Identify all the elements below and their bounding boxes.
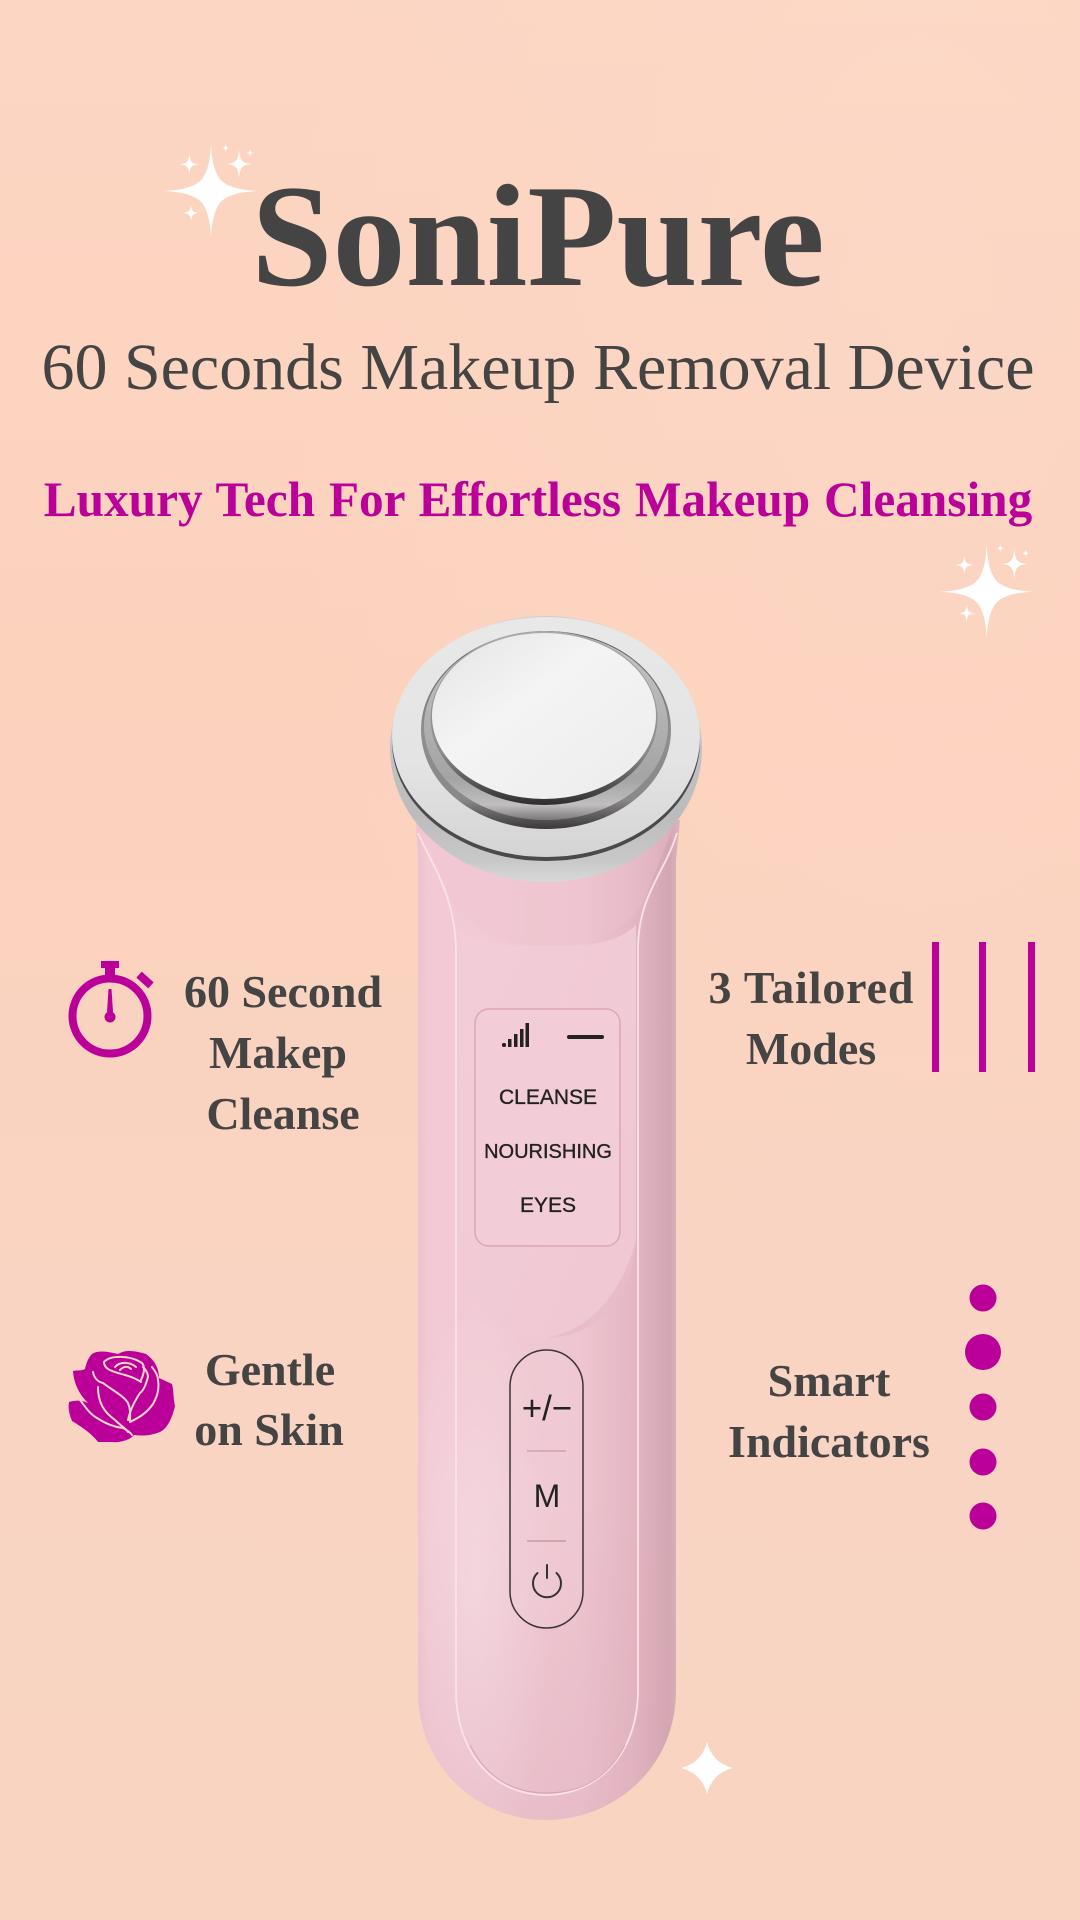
icon: stopwatch bbox=[72, 961, 154, 1054]
metal head bbox=[390, 616, 702, 882]
control buttons pill: +/− bbox=[522, 1389, 572, 1428]
subtitle: 60 Seconds Makeup Removal Device bbox=[42, 331, 1034, 404]
icon: power bbox=[533, 1565, 561, 1597]
feature: 3 tailored modes bbox=[708, 942, 1035, 1074]
feature: 60 second cleanse: 60 Second bbox=[184, 966, 382, 1017]
display screen bbox=[475, 1009, 620, 1246]
upper neck shade bbox=[661, 830, 672, 856]
feature: 3 tailored modes: 3 Tailored bbox=[708, 962, 914, 1013]
feature: smart indicators bbox=[728, 1284, 1001, 1530]
device body bbox=[416, 820, 680, 1820]
feature: gentle on skin: Gentle bbox=[205, 1344, 335, 1395]
tagline: Luxury Tech For Effortless Makeup Cleansing bbox=[44, 472, 1033, 527]
screen labels: EYES bbox=[520, 1194, 576, 1217]
title: SoniPure bbox=[251, 155, 825, 317]
icon: indicator dots bbox=[965, 1284, 1001, 1530]
icon: dash indicator bbox=[567, 1035, 604, 1039]
feature: 60 second cleanse: Cleanse bbox=[206, 1088, 360, 1139]
icon: sparkle lower right bbox=[681, 1742, 733, 1794]
feature: gentle on skin: on Skin bbox=[194, 1404, 344, 1455]
icon: rose bbox=[69, 1351, 175, 1442]
screen labels bbox=[484, 1086, 612, 1217]
icon: three bars bbox=[932, 942, 1035, 1072]
screen labels: CLEANSE bbox=[499, 1086, 597, 1109]
feature: 60 second cleanse: Makep bbox=[209, 1027, 347, 1078]
control buttons pill bbox=[510, 1350, 583, 1628]
icon: sparkles right of tagline bbox=[940, 545, 1034, 639]
feature: gentle on skin bbox=[69, 1344, 344, 1455]
central recess panel bbox=[588, 925, 636, 1307]
feature: 60 second cleanse bbox=[72, 961, 382, 1139]
device: facial cleansing wand bbox=[390, 616, 702, 1820]
feature: smart indicators: Smart bbox=[768, 1355, 891, 1406]
screen labels: NOURISHING bbox=[484, 1141, 612, 1163]
control buttons pill: M bbox=[534, 1478, 560, 1514]
feature: smart indicators: Indicators bbox=[728, 1416, 930, 1467]
icon: signal bars bbox=[502, 1023, 529, 1047]
feature: 3 tailored modes: Modes bbox=[746, 1023, 876, 1074]
body contour lines bbox=[418, 833, 677, 1795]
icon: sparkles near title bbox=[164, 144, 258, 238]
